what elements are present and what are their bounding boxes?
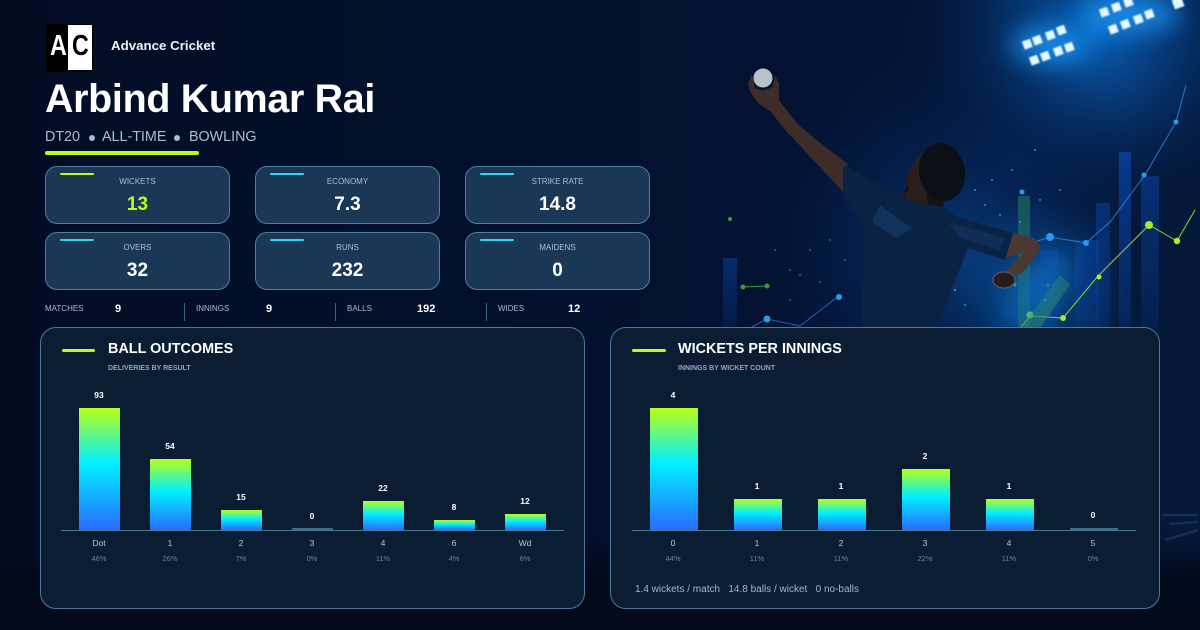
label: 3: 3	[310, 538, 314, 548]
bar: Wd	[505, 514, 546, 530]
label: Wd: Wd	[519, 538, 531, 548]
percent: 4: 11%	[1002, 554, 1016, 563]
logo	[46, 24, 93, 72]
percent: 2: 7%	[236, 554, 246, 563]
label: Dot: Dot	[92, 538, 106, 548]
wickets per innings accent	[632, 349, 666, 352]
title: Arbind Kumar Rai	[45, 77, 375, 121]
value: 54: 54	[165, 441, 175, 451]
value: 0: 0	[1091, 510, 1095, 520]
secondary stats row	[45, 303, 580, 321]
stat card: strike rate	[465, 166, 650, 224]
value: 2: 2	[923, 451, 927, 461]
wides label: WIDES	[498, 304, 524, 313]
label: 1: 1	[755, 538, 759, 548]
bar: 5 wickets	[1070, 528, 1118, 530]
bar: 2	[221, 510, 262, 530]
stat card: maidens: 0	[552, 260, 563, 281]
stat card: wickets	[45, 166, 230, 224]
stat card: overs: 32	[127, 260, 148, 281]
value: 93: 93	[94, 390, 104, 400]
logo letter A: A	[50, 30, 67, 62]
label: 4: 4	[1007, 538, 1011, 548]
wickets per innings subheading: INNINGS BY WICKET COUNT	[678, 365, 775, 372]
wickets per innings heading: WICKETS PER INNINGS	[678, 341, 842, 357]
stat card: runs	[255, 232, 440, 290]
stat card: runs: RUNS	[336, 243, 359, 252]
stat card: wickets: 13	[127, 194, 148, 215]
bar chart: ball outcomes	[61, 390, 564, 563]
label: 4: 4	[381, 538, 385, 548]
bar: 2 wickets	[818, 499, 866, 530]
value: 8: 8	[452, 502, 456, 512]
percent: 2: 11%	[834, 554, 848, 563]
label: 2: 2	[239, 538, 243, 548]
bar: 4 wickets	[986, 499, 1034, 530]
stat card: maidens: MAIDENS	[539, 243, 576, 252]
matches label: MATCHES	[45, 304, 84, 313]
value: 12: 12	[520, 496, 530, 506]
value: 0: 0	[310, 511, 314, 521]
stat card: strike rate: STRIKE RATE	[532, 177, 583, 186]
wides value: 12	[568, 303, 580, 315]
stat card: maidens	[465, 232, 650, 290]
value: 4: 4	[671, 390, 675, 400]
icon: bowler silhouette	[748, 68, 1040, 327]
percent: 6: 4%	[449, 554, 459, 563]
value: 22: 22	[378, 483, 388, 493]
subtitle: ALL-TIME	[102, 129, 166, 145]
label: 3: 3	[923, 538, 927, 548]
label: 6: 6	[452, 538, 456, 548]
bar: Dot	[79, 408, 120, 530]
brand name: Advance Cricket	[111, 38, 215, 53]
icon: stadium floodlights	[1012, 0, 1184, 66]
stat card: overs: OVERS	[123, 243, 152, 252]
value: 1: 1	[839, 481, 843, 491]
balls value: 192	[417, 303, 435, 315]
label: 2: 2	[839, 538, 843, 548]
bar: 6	[434, 520, 475, 530]
matches value: 9	[115, 303, 121, 315]
innings value: 9	[266, 303, 272, 315]
percent: Dot: 46%	[91, 554, 106, 563]
percent: 4: 11%	[376, 554, 390, 563]
percent: 0: 44%	[665, 554, 680, 563]
bar: 3	[292, 528, 333, 530]
stat card: economy: 7.3	[334, 194, 361, 215]
bar: 3 wickets	[902, 469, 950, 530]
logo light half	[68, 25, 92, 70]
panel: ball outcomes	[40, 327, 585, 609]
balls label: BALLS	[347, 304, 372, 313]
bar: 1	[150, 459, 191, 530]
percent: Wd: 6%	[520, 554, 530, 563]
bar: 0 wickets	[650, 408, 698, 530]
percent: 3: 0%	[307, 554, 317, 563]
bar: 4	[363, 501, 404, 530]
label: 5: 5	[1091, 538, 1095, 548]
stat card: economy	[255, 166, 440, 224]
value: 15: 15	[236, 492, 246, 502]
spark particles	[954, 149, 1061, 306]
percent: 1: 11%	[750, 554, 764, 563]
subtitle: DT20	[45, 129, 80, 145]
innings label: INNINGS	[196, 304, 229, 313]
ball outcomes accent	[62, 349, 95, 352]
bar: 1 wicket	[734, 499, 782, 530]
subtitle	[45, 129, 257, 145]
ball outcomes heading: BALL OUTCOMES	[108, 341, 233, 357]
label: 1: 1	[168, 538, 172, 548]
subtitle underline	[45, 151, 199, 155]
stat card: wickets: WICKETS	[119, 177, 156, 186]
percent: 1: 26%	[162, 554, 178, 563]
panel: wickets per innings	[610, 327, 1160, 609]
percent: 3: 22%	[917, 554, 932, 563]
label: 0: 0	[671, 538, 675, 548]
value: 1: 1	[1007, 481, 1011, 491]
stat card: runs: 232	[332, 260, 363, 281]
logo letter C: C	[72, 30, 89, 62]
value: 1: 1	[755, 481, 759, 491]
ball outcomes subheading: DELIVERIES BY RESULT	[108, 365, 191, 372]
subtitle: BOWLING	[189, 129, 257, 145]
stat card: overs	[45, 232, 230, 290]
stat card: economy: ECONOMY	[327, 177, 368, 186]
percent: 5: 0%	[1088, 554, 1098, 563]
footer stats: 1.4 wickets / match 14.8 balls / wicket 0 no-balls	[635, 584, 859, 595]
stat card: strike rate: 14.8	[539, 194, 576, 215]
